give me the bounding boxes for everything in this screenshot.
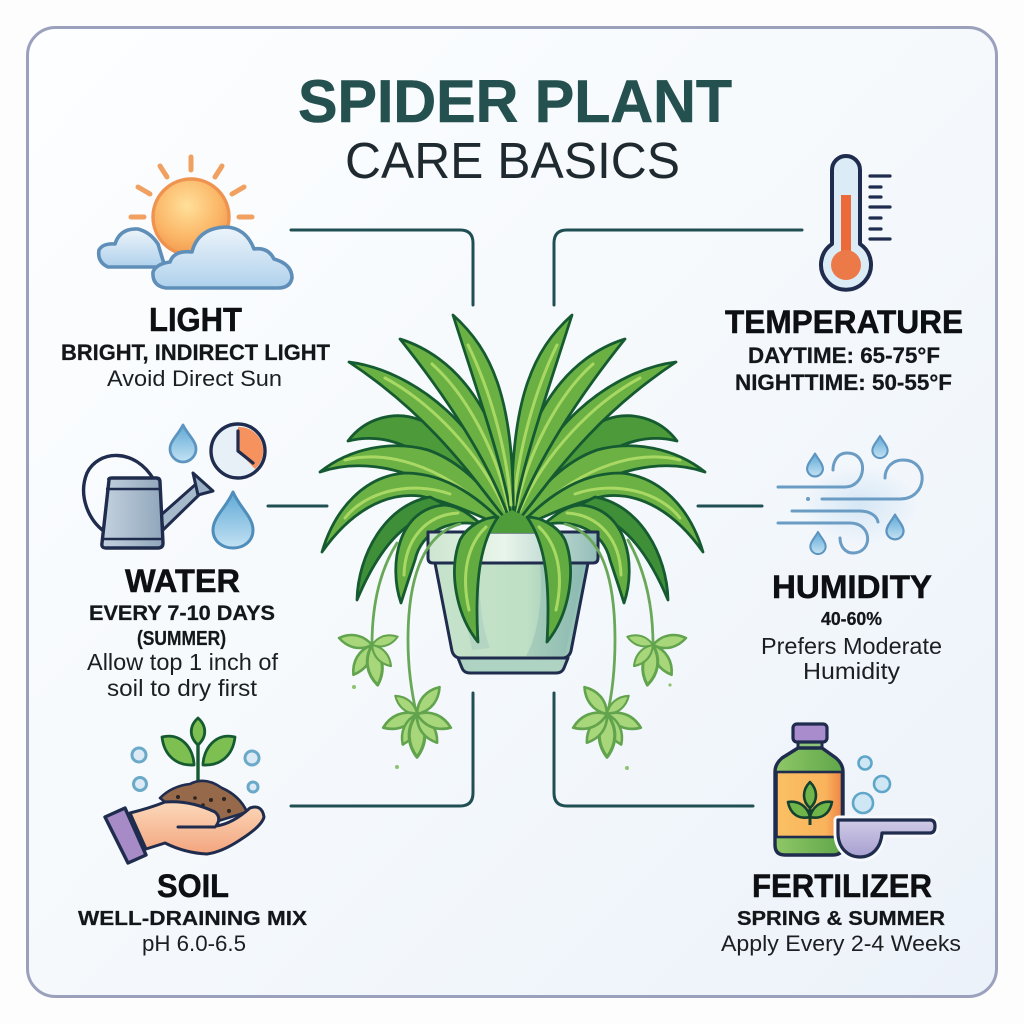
detail: fertilizer: SPRING & SUMMER xyxy=(737,908,946,930)
connector: light to plant xyxy=(291,230,473,305)
detail: humidity: 40-60% xyxy=(821,609,882,629)
detail: water: (SUMMER) xyxy=(137,628,226,650)
title xyxy=(298,68,732,189)
label: light: LIGHT xyxy=(149,301,242,338)
icon: wind and droplets xyxy=(778,436,922,554)
note: water: Allow top 1 inch of xyxy=(87,649,279,675)
note: humidity: Prefers Moderate xyxy=(761,633,942,659)
detail: light: BRIGHT, INDIRECT LIGHT xyxy=(61,340,331,365)
label: humidity: HUMIDITY xyxy=(772,569,932,605)
runners xyxy=(372,524,653,716)
detail: water: EVERY 7-10 DAYS xyxy=(89,602,275,625)
label: fertilizer: FERTILIZER xyxy=(752,868,932,904)
panel: fertilizer xyxy=(721,724,961,956)
icon: fertilizer bottle and scoop xyxy=(775,724,935,857)
panel: temperature xyxy=(725,156,963,395)
illustration: spider plant in pot xyxy=(320,315,705,770)
icon: hand holding soil and seedling xyxy=(105,718,264,863)
icon: watering can, clock and drops xyxy=(84,424,265,548)
icon: thermometer xyxy=(821,156,890,290)
note: water xyxy=(87,649,279,701)
detail: temperature: NIGHTTIME: 50-55°F xyxy=(735,370,952,395)
connector: water to plant xyxy=(268,504,327,508)
label: water: WATER xyxy=(125,563,240,599)
panel: soil xyxy=(78,718,308,956)
detail: water xyxy=(89,602,275,650)
title: SPIDER PLANT xyxy=(298,68,732,135)
panel: light xyxy=(61,157,331,391)
connector: fertilizer to plant xyxy=(554,693,753,806)
pot xyxy=(428,532,598,673)
icon: sun and clouds xyxy=(99,157,292,288)
panel: water xyxy=(84,424,279,701)
note: fertilizer: Apply Every 2-4 Weeks xyxy=(721,931,961,956)
connector: temperature to plant xyxy=(554,230,802,305)
detail: temperature: DAYTIME: 65-75°F xyxy=(748,343,940,368)
plantlets xyxy=(338,632,687,770)
connector: humidity to plant xyxy=(698,504,762,508)
note: humidity: Humidity xyxy=(803,658,901,684)
label: temperature: TEMPERATURE xyxy=(725,304,963,340)
note: humidity xyxy=(761,633,942,684)
connector: soil to plant xyxy=(291,693,473,806)
label: soil: SOIL xyxy=(157,868,229,904)
note: soil: pH 6.0-6.5 xyxy=(142,931,246,956)
note: light: Avoid Direct Sun xyxy=(107,366,282,391)
detail: soil: WELL-DRAINING MIX xyxy=(78,908,308,930)
title: CARE BASICS xyxy=(345,132,680,189)
panel: humidity xyxy=(761,436,942,684)
detail: temperature xyxy=(735,343,952,395)
note: water: soil to dry first xyxy=(107,675,258,701)
